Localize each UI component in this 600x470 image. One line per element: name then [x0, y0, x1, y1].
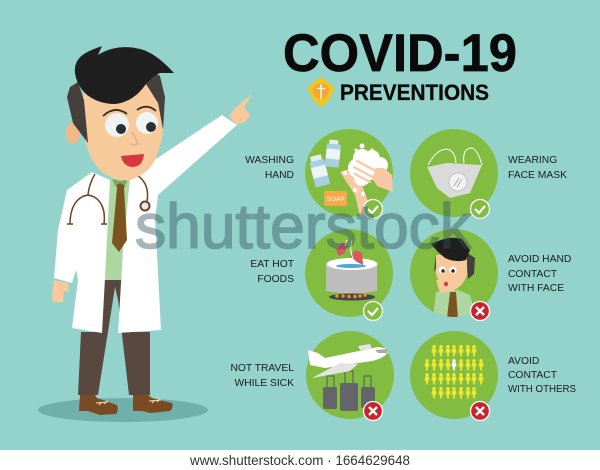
label: washing hand: HAND	[265, 170, 294, 181]
label: eat hot foods: FOODS	[257, 274, 294, 285]
label: eat hot foods: EAT HOT	[250, 259, 295, 270]
mask	[427, 163, 482, 198]
soap bar: SOAP	[326, 196, 345, 203]
eyes	[103, 107, 158, 137]
cross badge	[470, 302, 490, 320]
head	[436, 254, 467, 291]
green circle	[306, 331, 394, 419]
face	[83, 84, 163, 180]
panel: avoid contact with others	[410, 331, 576, 420]
cross badge	[364, 402, 382, 420]
green circle	[410, 331, 498, 419]
crowd of people	[424, 345, 484, 398]
trousers	[78, 270, 150, 395]
green circle	[305, 129, 393, 217]
left hand	[52, 280, 69, 302]
steam	[345, 240, 353, 258]
label: not travel while sick: WHILE SICK	[234, 378, 294, 389]
stethoscope	[67, 174, 150, 224]
label: avoid contact with others: WITH OTHERS	[508, 384, 576, 395]
ear	[66, 122, 80, 144]
mask valve	[449, 173, 467, 191]
tie	[112, 181, 127, 252]
burner	[329, 293, 375, 300]
left shoe	[79, 395, 118, 415]
label: wearing face mask: FACE MASK	[508, 170, 567, 181]
body	[434, 290, 473, 317]
mouth	[444, 282, 448, 286]
check badge	[470, 200, 490, 218]
title: COVID-19	[283, 24, 517, 83]
airplane	[308, 344, 388, 378]
eyes	[438, 266, 456, 274]
green circle	[305, 229, 393, 317]
label: avoid contact with others: CONTACT	[508, 370, 558, 381]
sanitizer bottle left	[308, 154, 330, 188]
label: avoid contact with others: AVOID	[508, 356, 539, 367]
shirt	[102, 178, 130, 280]
footer credit: www.shutterstock.com · 1664629648	[189, 453, 410, 468]
upper hand	[354, 161, 393, 192]
doctor character	[38, 46, 252, 422]
suitcases	[323, 371, 375, 411]
person touching face	[431, 238, 477, 318]
ground shadow	[38, 398, 208, 422]
panel: eat hot foods	[250, 229, 393, 320]
nose	[131, 132, 138, 145]
lab coat	[54, 115, 237, 333]
collar	[112, 179, 128, 186]
panel: avoid hand contact with face	[410, 229, 571, 320]
green circle	[410, 129, 498, 217]
hair	[75, 46, 174, 104]
mask straps	[428, 148, 482, 165]
panel: not travel while sick	[230, 331, 394, 420]
panel: washing hand	[245, 129, 393, 218]
sanitizer bottle right	[325, 139, 341, 168]
side hair	[434, 252, 475, 279]
label: not travel while sick: NOT TRAVEL	[230, 363, 294, 374]
tie	[447, 292, 458, 318]
cross badge	[470, 402, 490, 420]
green circle	[410, 229, 498, 317]
watermark: shutterstock	[135, 192, 471, 262]
pointing hand	[229, 94, 252, 125]
back hair overlap	[70, 90, 88, 143]
label: wearing face mask: WEARING	[508, 155, 557, 166]
foam	[343, 144, 388, 196]
check badge	[364, 200, 382, 218]
pot	[326, 258, 378, 294]
mouth	[121, 154, 144, 167]
label: avoid hand contact with face: CONTACT	[508, 269, 558, 280]
shield icon	[308, 77, 334, 107]
subtitle: PREVENTIONS	[340, 80, 489, 105]
check badge	[364, 302, 382, 320]
label: washing hand: WASHING	[245, 155, 294, 166]
meat	[336, 242, 363, 265]
hand on cheek	[436, 280, 450, 293]
lower hand	[340, 168, 372, 216]
soap bar	[324, 191, 347, 206]
hair	[431, 238, 470, 261]
label: avoid hand contact with face: AVOID HAND	[508, 254, 571, 265]
back hair	[67, 70, 165, 143]
label: avoid hand contact with face: WITH FACE	[508, 283, 564, 294]
panel: wearing face mask	[410, 129, 567, 218]
right shoe	[133, 395, 173, 413]
